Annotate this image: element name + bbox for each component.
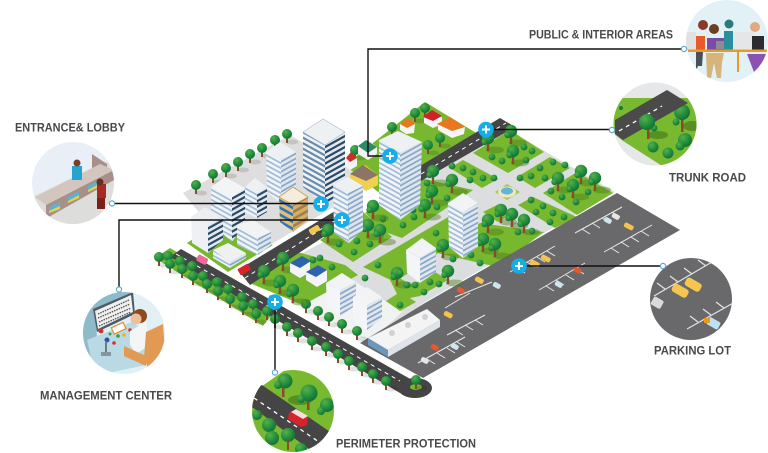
building: dark blue block bbox=[191, 207, 223, 253]
block trees bbox=[481, 132, 504, 154]
building: south block 1 bbox=[326, 273, 356, 316]
label: management center: MANAGEMENT CENTER bbox=[40, 388, 172, 402]
plus marker: management center bbox=[334, 212, 350, 228]
building: front tower bbox=[333, 177, 363, 243]
building: centre tower bbox=[448, 193, 478, 258]
circle: perimeter protection bbox=[252, 370, 336, 453]
ground: paved base bbox=[255, 128, 615, 342]
building: low flat bbox=[213, 243, 246, 268]
building: white tower rear bbox=[266, 142, 296, 203]
building: tall dark tower bbox=[303, 119, 345, 205]
building: main tower bbox=[379, 131, 422, 220]
label: perimeter protection: PERIMETER PROTECTION bbox=[336, 436, 476, 450]
residential trees bbox=[387, 122, 403, 138]
circle: public and interior areas bbox=[686, 0, 768, 82]
plaza behind towers bbox=[183, 135, 362, 262]
connector end dots bbox=[109, 46, 687, 375]
building: shopping mall bbox=[368, 309, 440, 357]
building: tan bbox=[279, 187, 308, 232]
houses bbox=[290, 110, 465, 287]
label: trunk road: TRUNK ROAD bbox=[669, 170, 746, 184]
building: large white bbox=[211, 177, 245, 242]
plus marker: perimeter protection bbox=[267, 294, 283, 310]
connector lines bbox=[112, 49, 684, 372]
circle: entrance and lobby bbox=[32, 142, 114, 224]
circle: management center bbox=[83, 292, 165, 374]
building: south block 2 bbox=[353, 287, 382, 330]
green: central blocks bbox=[155, 130, 613, 326]
circle: trunk road bbox=[614, 82, 696, 166]
plus marker: entrance and lobby bbox=[313, 196, 329, 212]
label: entrance and lobby: ENTRANCE& LOBBY bbox=[15, 120, 125, 134]
vehicles on road bbox=[196, 224, 321, 306]
buildings bbox=[191, 119, 478, 357]
building: mid block bbox=[406, 238, 436, 283]
green: residential area bbox=[345, 102, 478, 192]
label: parking lot: PARKING LOT bbox=[654, 344, 732, 358]
fountain bbox=[495, 184, 520, 200]
building: white block bbox=[237, 220, 271, 255]
road: perimeter bbox=[170, 249, 432, 398]
plus marker: trunk road bbox=[478, 122, 494, 137]
road: trunk bbox=[238, 118, 515, 285]
plus marker: public and interior areas bbox=[382, 148, 398, 164]
circle: parking lot bbox=[650, 258, 735, 340]
building: side block bbox=[245, 178, 267, 218]
trees bbox=[154, 103, 611, 392]
isometric city map bbox=[154, 102, 680, 398]
ground: pale yard around south blocks bbox=[300, 275, 402, 342]
label: public and interior areas: PUBLIC & INTERIOR AREAS bbox=[529, 28, 673, 42]
plus marker: parking lot bbox=[511, 258, 527, 274]
parking lot bbox=[360, 193, 680, 378]
